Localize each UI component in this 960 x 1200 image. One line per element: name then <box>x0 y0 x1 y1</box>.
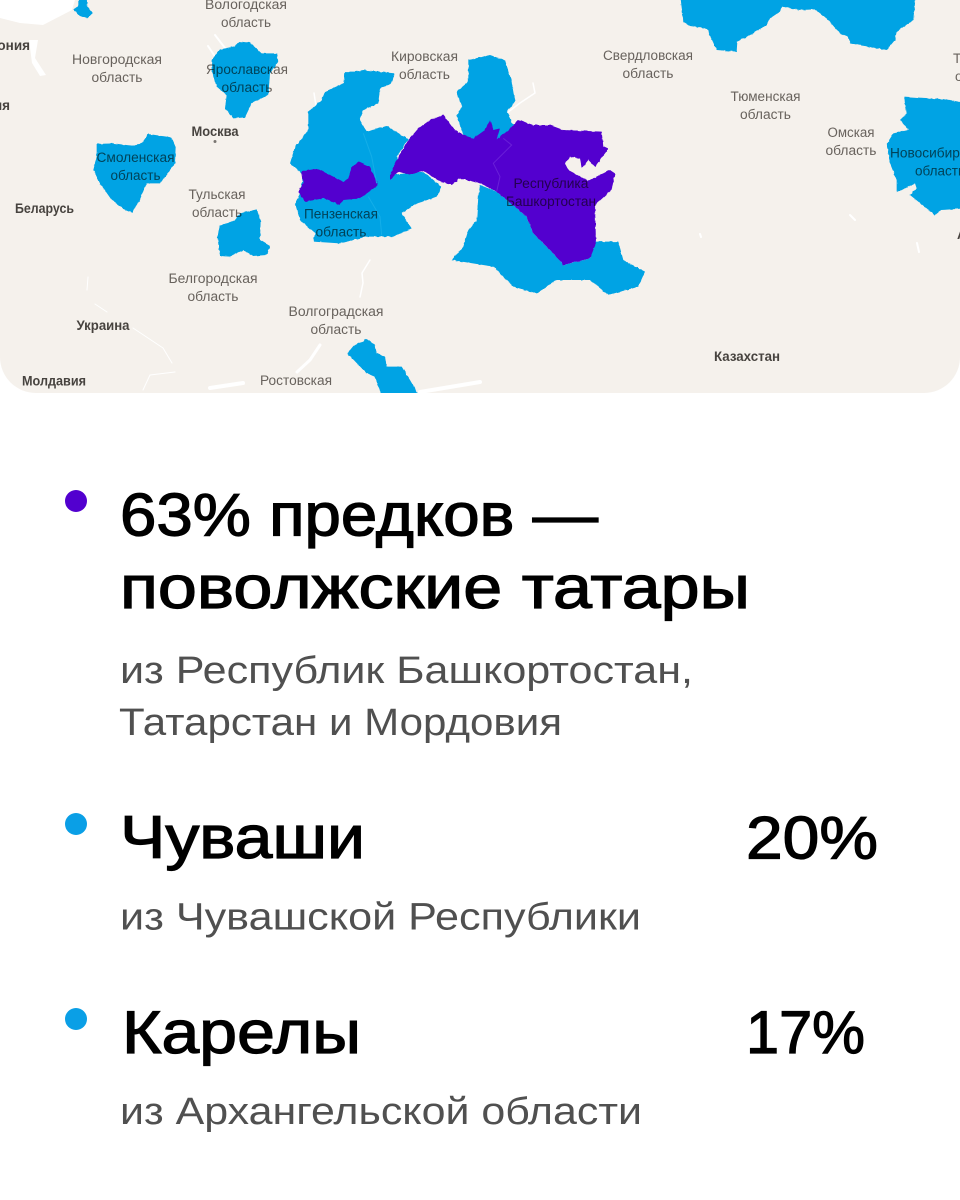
regions: east <box>680 0 960 215</box>
map labels: область <box>221 15 271 30</box>
map labels: область <box>192 205 242 220</box>
heading: Karelians: Карелы <box>122 999 361 1066</box>
map labels: область <box>188 289 238 304</box>
heading: Chuvash: Чуваши <box>120 804 365 871</box>
map labels: Кировская <box>391 49 458 64</box>
map labels: Волгоградская <box>288 304 384 319</box>
region: top-left lake area <box>73 0 93 18</box>
map labels: Молдавия <box>22 374 86 388</box>
map labels: область <box>399 67 450 82</box>
region: Tatarstan and Bashkortostan <box>390 115 615 265</box>
map labels: область <box>316 224 366 240</box>
region: Orenburg and Samara <box>452 185 645 295</box>
map labels: Тульская <box>188 187 246 202</box>
water: rivers and coast <box>0 0 919 392</box>
value: 20%: 20% <box>746 804 878 872</box>
map labels: Белгородская <box>168 271 258 286</box>
map panel <box>0 0 960 400</box>
map labels: Ярославская <box>206 62 288 77</box>
value: 17%: 17% <box>746 999 865 1066</box>
description line one: из Республик Башкортостан, <box>120 650 693 692</box>
bullet: blue <box>65 813 87 835</box>
map labels: Новгородская <box>72 52 162 67</box>
map labels: область <box>222 80 272 95</box>
regions: central Russia (blue) <box>73 0 278 257</box>
item: Chuvash <box>65 804 878 938</box>
map labels: Ростовская <box>260 373 332 388</box>
item: Karelians <box>65 999 865 1133</box>
bullet: purple <box>65 490 87 512</box>
map labels: Омская <box>828 125 874 140</box>
map labels: область <box>92 70 142 85</box>
map labels: область <box>740 107 791 122</box>
regions: Volga blue <box>290 55 645 295</box>
region: Tula <box>217 209 270 257</box>
description line two: Татарстан и Мордовия <box>119 702 562 744</box>
map labels: Украина <box>76 318 130 333</box>
region: Astrakhan <box>347 338 418 393</box>
map labels: область <box>110 168 160 183</box>
region: Mordovia <box>298 162 378 205</box>
map labels <box>0 0 960 388</box>
map labels: Беларусь <box>15 201 74 216</box>
map labels: Свердловская <box>603 48 693 63</box>
map labels: Казахстан <box>714 349 780 364</box>
region: Smolensk <box>93 134 176 213</box>
description: из Чувашской Республики <box>120 896 641 938</box>
region: Yamal and Khanty-Mansi <box>680 0 916 52</box>
map labels: Пензенская <box>304 206 378 222</box>
region: Yaroslavl <box>212 42 278 118</box>
heading: 63%: 63% предков — <box>120 482 598 548</box>
bullet: blue <box>65 1008 87 1030</box>
Moscow dot <box>214 140 216 143</box>
description: из Архангельской области <box>120 1091 642 1133</box>
map labels: Башкортостан <box>506 194 596 209</box>
region: Penza group <box>290 70 442 243</box>
item: Volga Tatars <box>65 482 750 744</box>
regions: purple <box>298 115 615 265</box>
map labels: область <box>310 322 362 337</box>
region: Udmurtia <box>457 55 515 143</box>
map labels: Смоленская <box>96 150 174 165</box>
heading: line two: поволжские татары <box>120 554 750 621</box>
map labels: Тюменская <box>730 89 800 104</box>
map labels: Москва <box>192 124 239 139</box>
map labels: область <box>826 143 876 158</box>
region: Novosibirsk <box>887 97 960 215</box>
region borders <box>363 133 512 235</box>
map labels: область <box>622 66 674 81</box>
map labels: Республика <box>514 176 589 191</box>
